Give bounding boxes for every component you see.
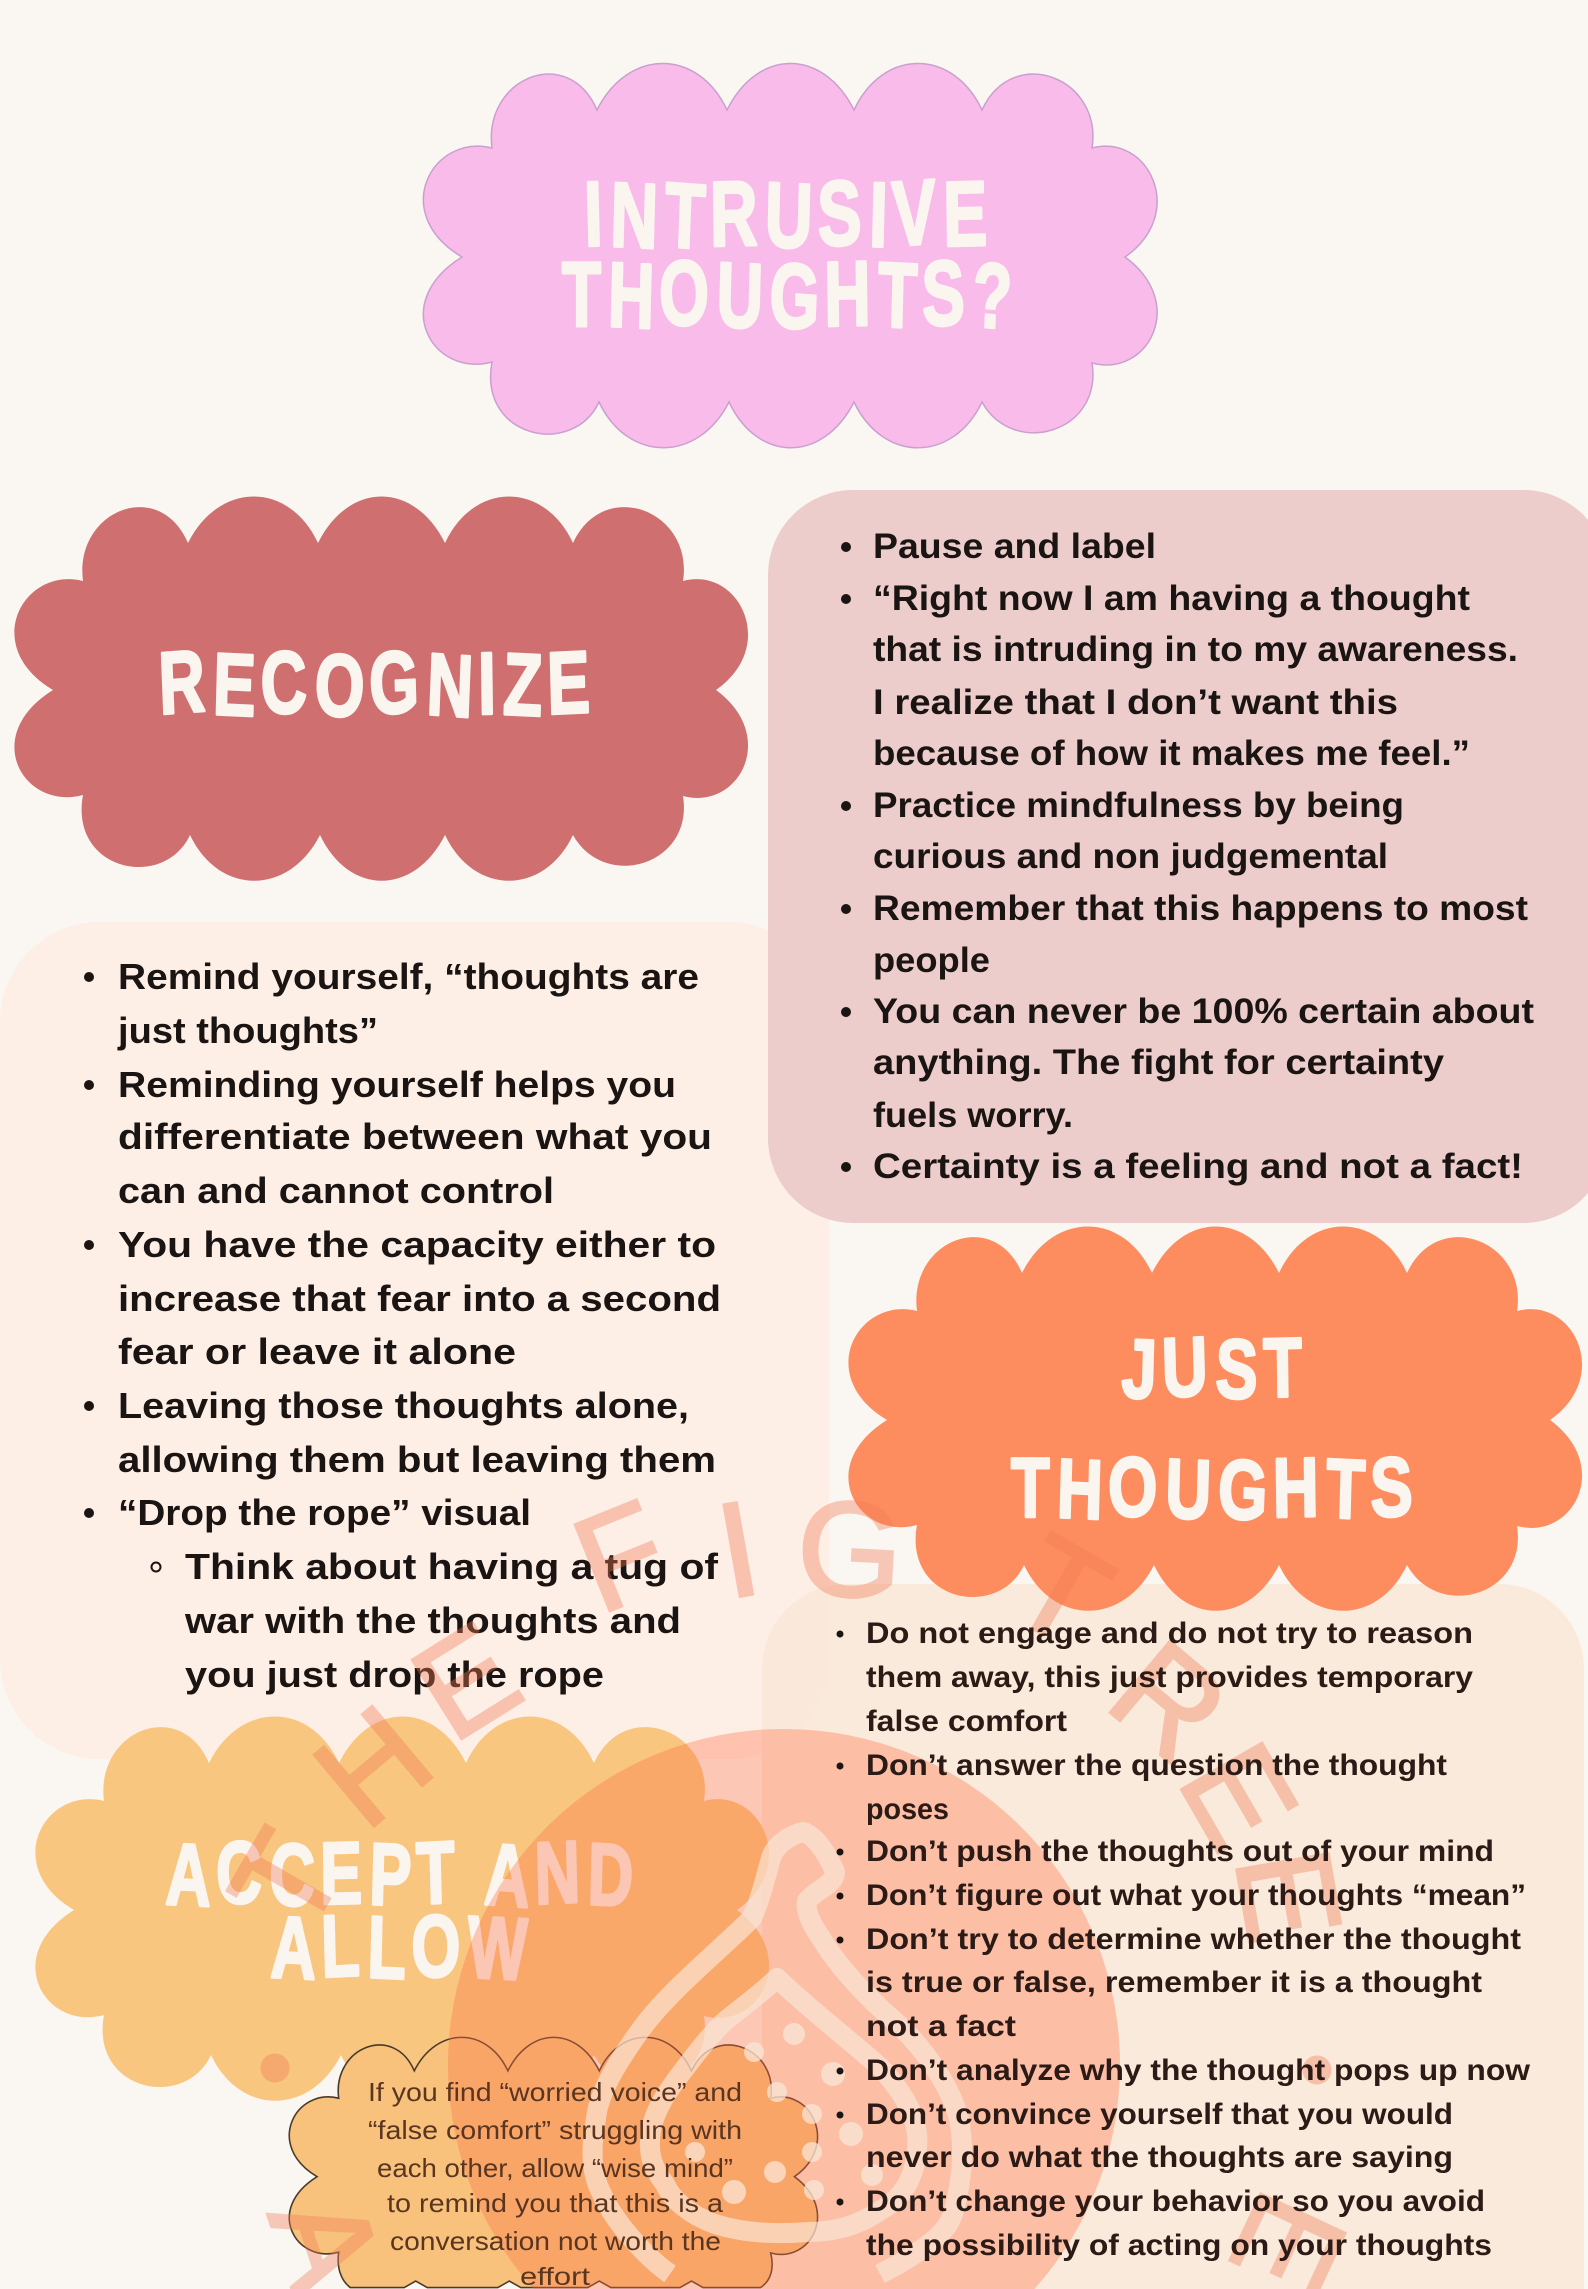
- list: pause and label tips: Practice mindfulness by being: [873, 786, 1404, 825]
- list: do not engage tips: is true or false, remember it is a thought: [866, 1966, 1482, 1999]
- list: recognize tips: [84, 956, 721, 1695]
- accept and allow heading: ACCEPT AND: [164, 1822, 642, 1926]
- list: recognize tips: you just drop the rope: [185, 1654, 604, 1695]
- list: do not engage tips: false comfort: [866, 1705, 1067, 1738]
- watermark lettering: R: [1083, 1612, 1255, 1790]
- list: do not engage tips: Don’t figure out what your thoughts “mean”: [866, 1879, 1526, 1912]
- list: recognize tips: fear or leave it alone: [118, 1331, 516, 1372]
- list: pause and label tips: curious and non judgemental: [873, 837, 1388, 876]
- list: recognize tips: just thoughts”: [117, 1010, 378, 1051]
- callout text: “false comfort” struggling with: [368, 2115, 742, 2145]
- recognize heading: RECOGNIZE: [156, 631, 598, 736]
- title cloud: [423, 64, 1157, 448]
- list: do not engage tips: Don’t push the thoughts out of your mind: [866, 1835, 1494, 1868]
- list: recognize tips: “Drop the rope” visual: [118, 1492, 531, 1533]
- list: do not engage tips: them away, this just provides temporary: [866, 1661, 1473, 1694]
- list: pause and label tips: Certainty is a feeling and not a fact!: [873, 1147, 1523, 1186]
- callout text: [368, 2077, 742, 2289]
- list: pause and label tips: people: [873, 941, 990, 980]
- list: pause and label tips: Pause and label: [873, 527, 1156, 566]
- list: pause and label tips: anything. The fight for certainty: [873, 1043, 1445, 1082]
- list: recognize tips: increase that fear into a second: [118, 1278, 721, 1319]
- list: do not engage tips: Do not engage and do not try to reason: [866, 1617, 1473, 1650]
- callout text: to remind you that this is a: [387, 2188, 724, 2218]
- accept and allow heading: [164, 1822, 642, 1998]
- icon: fig outline: [593, 1832, 962, 2274]
- list: do not engage tips: [836, 1617, 1531, 2262]
- list: do not engage tips: Don’t answer the question the thought: [866, 1749, 1447, 1782]
- panel: recognize tips: [0, 922, 829, 1759]
- list: pause and label tips: I realize that I don’t want this: [873, 683, 1398, 722]
- watermark lettering: E: [1151, 1719, 1327, 1872]
- watermark lettering: T: [988, 1505, 1135, 1677]
- callout: wise mind cloud: [289, 2037, 818, 2288]
- list: do not engage tips: poses: [866, 1793, 949, 1826]
- list: do not engage tips: Don’t convince yourself that you would: [866, 2098, 1453, 2131]
- title text: INTRUSIVE: [582, 161, 994, 268]
- callout text: conversation not worth the: [390, 2226, 721, 2256]
- accept and allow cloud: [35, 1716, 769, 2101]
- panel: pause and label tips: [768, 490, 1588, 1223]
- list: recognize tips: allowing them but leaving them: [118, 1439, 716, 1480]
- watermark lettering: [200, 1471, 1376, 2289]
- list: do not engage tips: the possibility of acting on your thoughts: [866, 2229, 1492, 2262]
- watermark lettering: F: [554, 1471, 687, 1642]
- callout text: each other, allow “wise mind”: [377, 2153, 733, 2183]
- list: recognize tips: war with the thoughts and: [184, 1600, 681, 1641]
- title text: THOUGHTS?: [562, 242, 1021, 349]
- watermark lettering: E: [1206, 1838, 1371, 1953]
- just thoughts heading: THOUGHTS: [1011, 1439, 1421, 1538]
- list: recognize tips: Think about having a tug of: [185, 1546, 719, 1587]
- list: recognize tips: You have the capacity either to: [118, 1224, 716, 1265]
- callout text: If you find “worried voice” and: [368, 2077, 742, 2107]
- just thoughts cloud: [848, 1226, 1582, 1611]
- list: pause and label tips: that is intruding in to my awareness.: [873, 630, 1518, 669]
- list: recognize tips: Reminding yourself helps you: [118, 1064, 676, 1105]
- watermark lettering: G: [794, 1471, 906, 1628]
- list: do not engage tips: Don’t try to determine whether the thought: [866, 1923, 1521, 1956]
- watermark circle: [448, 1729, 1120, 2289]
- panel: just thoughts background: [762, 1584, 1584, 2289]
- list: pause and label tips: “Right now I am having a thought: [873, 579, 1470, 618]
- list: recognize tips: can and cannot control: [118, 1170, 554, 1211]
- icon: fig seeds: [685, 2023, 883, 2204]
- list: do not engage tips: never do what the thoughts are saying: [866, 2141, 1453, 2174]
- just thoughts heading: [1011, 1319, 1421, 1538]
- recognize cloud: [14, 496, 748, 881]
- watermark lettering: T: [200, 1807, 372, 1954]
- list: do not engage tips: not a fact: [866, 2010, 1016, 2043]
- watermark lettering: I: [707, 1472, 770, 1627]
- list: recognize tips: Leaving those thoughts alone,: [118, 1385, 689, 1426]
- list: pause and label tips: [841, 527, 1534, 1186]
- watermark lettering: E: [388, 1593, 544, 1769]
- watermark lettering: H: [287, 1677, 459, 1855]
- list: recognize tips: differentiate between what you: [118, 1116, 712, 1157]
- list: do not engage tips: Don’t change your behavior so you avoid: [866, 2185, 1485, 2218]
- list: pause and label tips: You can never be 100% certain about: [873, 992, 1534, 1031]
- list: recognize tips: Remind yourself, “thoughts are: [118, 956, 699, 997]
- title text: [562, 161, 1021, 349]
- accept and allow heading: ALLOW: [269, 1895, 536, 1998]
- list: pause and label tips: because of how it makes me feel.”: [873, 734, 1470, 773]
- list: do not engage tips: Don’t analyze why the thought pops up now: [866, 2054, 1531, 2087]
- list: pause and label tips: fuels worry.: [873, 1096, 1073, 1135]
- watermark: the fig tree logo: [200, 1471, 1376, 2289]
- just thoughts heading: JUST: [1120, 1319, 1309, 1417]
- list: pause and label tips: Remember that this happens to most: [873, 889, 1528, 928]
